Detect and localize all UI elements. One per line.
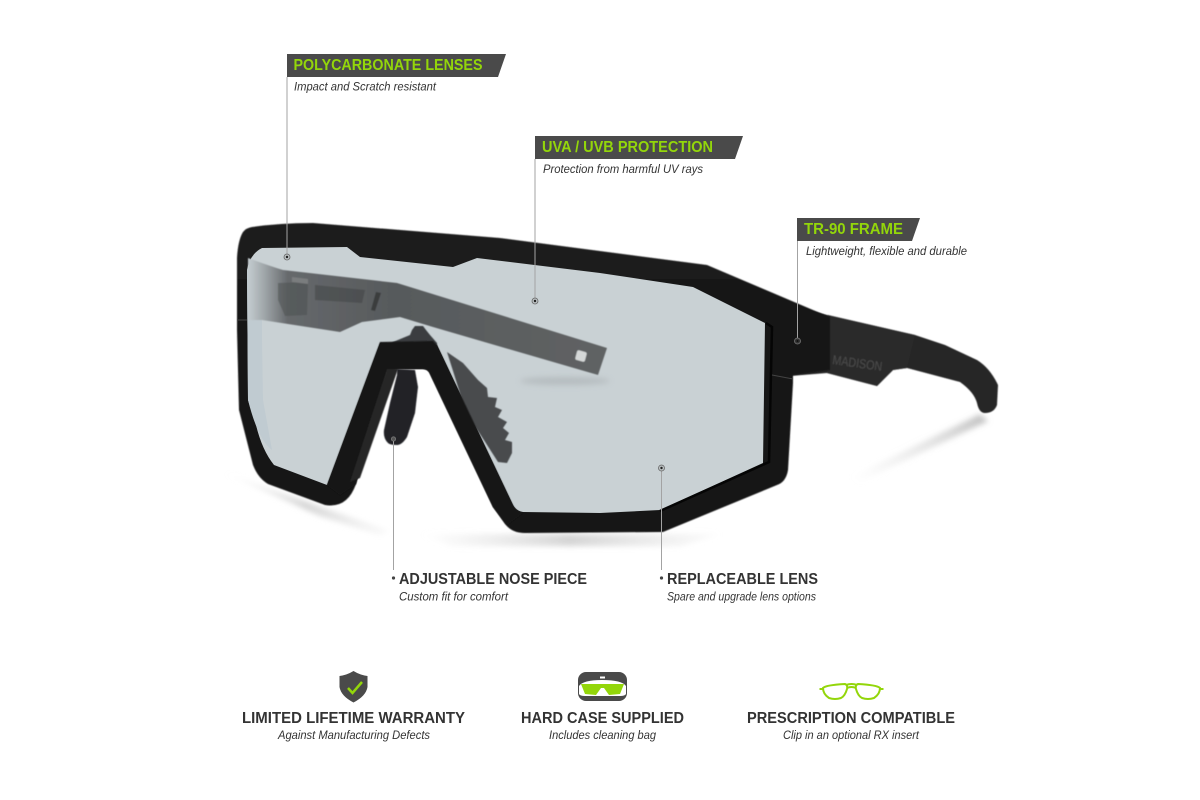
frame silhouette [237,223,830,533]
feature: hard case supplied: HARD CASE SUPPLIED [521,710,684,727]
temple soft shadow [520,377,610,385]
glasses product image [222,223,998,546]
callout: TR-90 frame: TR-90 FRAME [804,221,903,238]
brand mark: MADISON [832,352,883,374]
temple arm outer [790,308,998,413]
feature: hard case supplied: Includes cleaning bag [549,730,657,742]
feature: limited lifetime warranty: LIMITED LIFETIME WARRANTY [242,710,465,727]
icon: shield with check [340,671,368,702]
left leg lighter strip [350,369,398,482]
feature: prescription compatible: PRESCRIPTION COMPATIBLE [747,710,955,727]
frame gap line [237,320,793,379]
callout: polycarbonate lenses: POLYCARBONATE LENSES [294,57,483,74]
shadow under glasses [222,414,988,546]
nose bridge top clip [385,326,437,348]
icon: hard case with green glasses [578,672,627,701]
feature: limited lifetime warranty: Against Manufacturing Defects [277,730,430,742]
callout: UV protection: Protection from harmful UV rays [543,164,703,176]
icon: green eyeglasses outline [820,684,884,699]
feature: prescription compatible [747,684,955,742]
callout: TR-90 frame: Lightweight, flexible and durable [806,246,967,258]
callout: replaceable lens: REPLACEABLE LENS [667,571,818,588]
callout: replaceable lens [658,465,818,604]
lens [247,247,765,513]
feature: hard case supplied [521,672,684,742]
lens left edge strip [247,268,272,450]
feature: limited lifetime warranty [242,671,465,742]
callout: TR-90 frame [794,218,967,344]
feature: prescription compatible: Clip in an optional RX insert [783,730,920,742]
bridge of frame [327,341,523,525]
inner temple seen through lens [248,258,607,375]
nose piece left [384,369,418,445]
nose pad right [447,352,512,463]
callout: adjustable nose piece: Custom fit for comfort [399,592,509,604]
callout: polycarbonate lenses [284,54,506,260]
callout: adjustable nose piece [391,437,587,604]
callout: UV protection: UVA / UVB PROTECTION [542,139,713,156]
callout: adjustable nose piece: ADJUSTABLE NOSE PIECE [399,571,587,588]
callout: UV protection [532,136,743,304]
lens frame dark inner edge [660,323,772,511]
callout: replaceable lens: Spare and upgrade lens options [667,592,816,604]
callout: polycarbonate lenses: Impact and Scratch resistant [294,82,437,94]
